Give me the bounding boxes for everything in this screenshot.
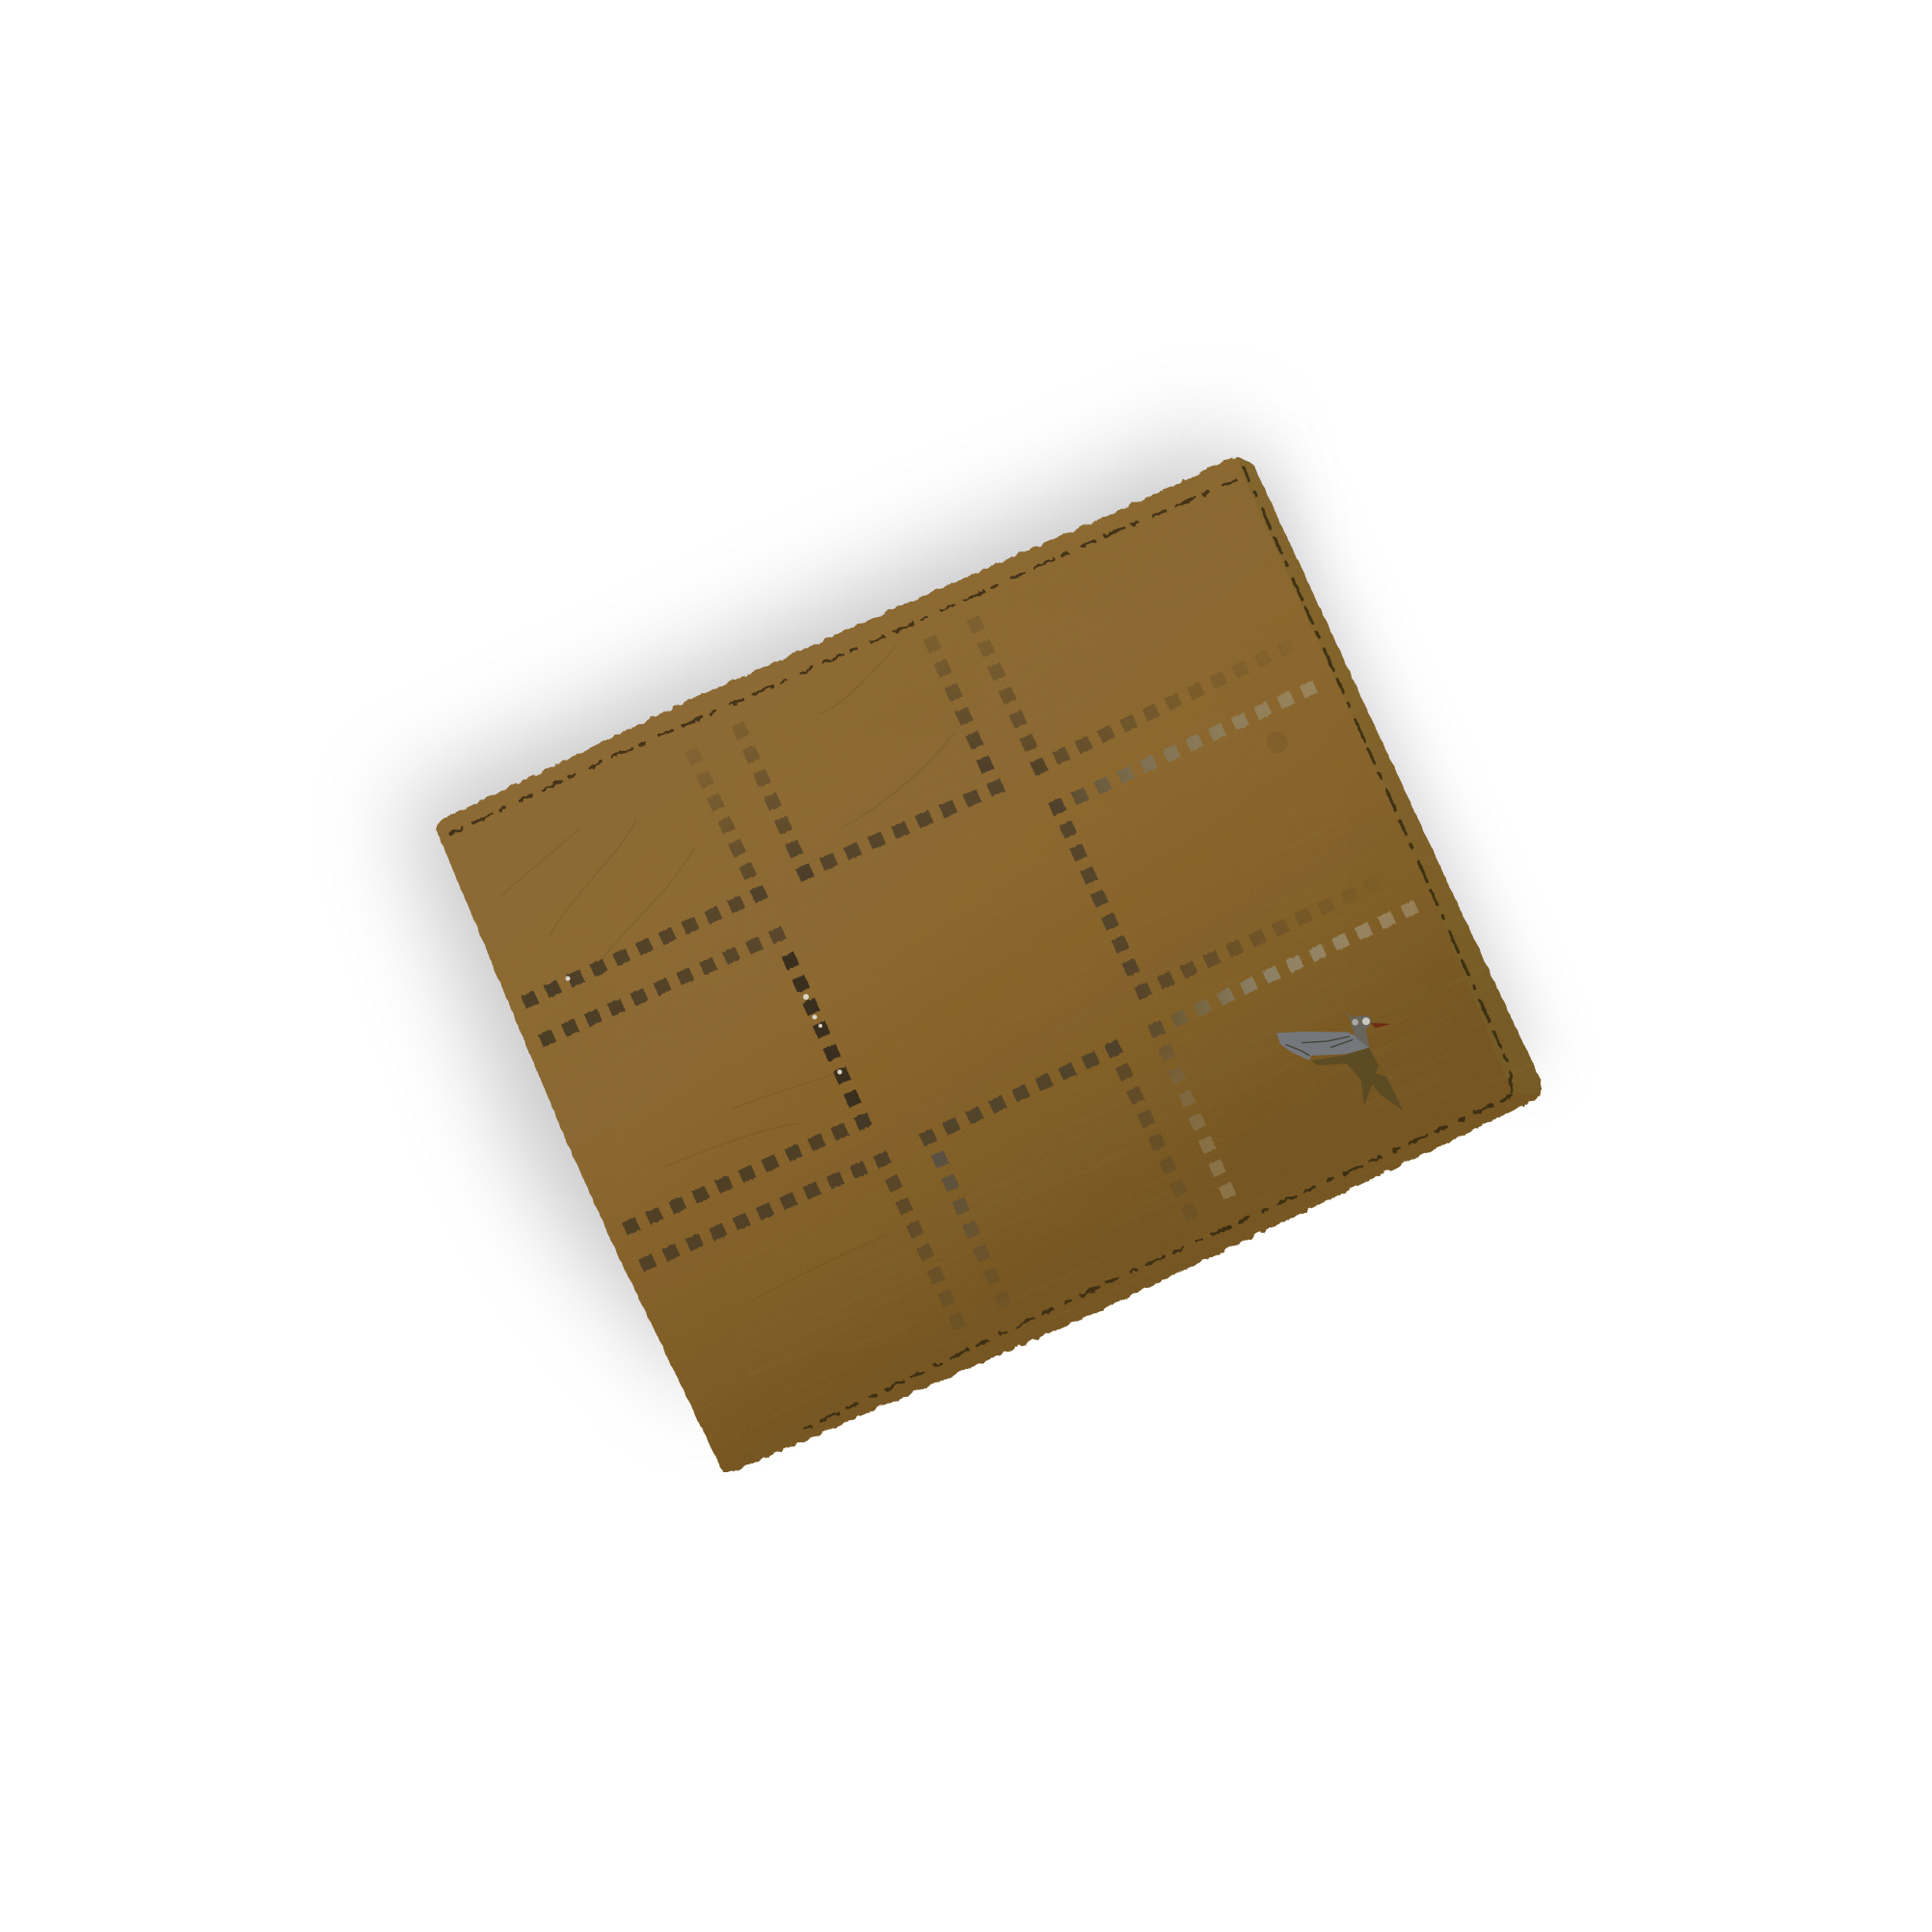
lower corner shading xyxy=(436,456,1541,1472)
product photo: wallet on white xyxy=(372,407,1548,1473)
stitch line: lower left horizontal upper xyxy=(625,1118,870,1229)
stitch line: upper left vertical inner xyxy=(738,724,808,879)
stitch line: lower left horizontal lower xyxy=(641,1157,889,1266)
stitch line: bottom vertical left xyxy=(891,1177,960,1328)
wing feather lines xyxy=(1285,1036,1353,1056)
stitch line: bottom vertical right xyxy=(937,1153,1006,1306)
faint shadow on right side xyxy=(1157,453,1543,1065)
stitch line: upper right horizontal bottom xyxy=(1051,686,1315,810)
pebbled wrinkles upper left xyxy=(501,646,954,1301)
icon: bird emblem xyxy=(1276,1010,1403,1111)
stitch line: upper right vertical outer xyxy=(929,637,988,771)
stitch line: lower right vertical left xyxy=(1111,1042,1193,1219)
stitch line: upper right horizontal top xyxy=(1033,645,1292,769)
stitch line: central left vertical xyxy=(788,954,866,1128)
wallet xyxy=(436,456,1541,1472)
stitch line: lower right vertical right xyxy=(1154,1023,1230,1197)
bird beak xyxy=(1371,1023,1391,1028)
edge seam stitching xyxy=(450,468,1512,1430)
stitch line: lower right horizontal bottom xyxy=(1150,906,1416,1033)
right seam xyxy=(1244,468,1512,1092)
stitch line: upper right vertical inner xyxy=(973,618,1042,773)
bird wing xyxy=(1276,1032,1369,1060)
bird eyes xyxy=(1362,1017,1370,1025)
stitch line: left horizontal lower xyxy=(541,932,784,1041)
stitch line: lower centre horizontal xyxy=(922,1046,1120,1140)
wallet leather body xyxy=(436,456,1541,1472)
stitch line: lower right horizontal top xyxy=(1137,882,1379,994)
right edge band xyxy=(1237,456,1541,1094)
stitch line: central right vertical xyxy=(1055,800,1134,974)
bird head xyxy=(1343,1010,1372,1048)
stitch line: upper centre horizontal xyxy=(798,785,1003,875)
bird body and tail xyxy=(1311,1048,1403,1111)
metallic specks in central stitches xyxy=(565,976,843,1074)
stitch line: upper left vertical outer xyxy=(691,750,762,900)
plaid stitch pattern xyxy=(523,618,1416,1328)
soft shadow behind wallet: top and left xyxy=(400,429,1253,1398)
stitch line: left horizontal upper xyxy=(523,891,765,1003)
faint stain spot xyxy=(1267,732,1288,753)
top seam xyxy=(450,477,1244,834)
leather grain texture xyxy=(440,456,1539,1472)
bottom seam xyxy=(803,1096,1512,1430)
